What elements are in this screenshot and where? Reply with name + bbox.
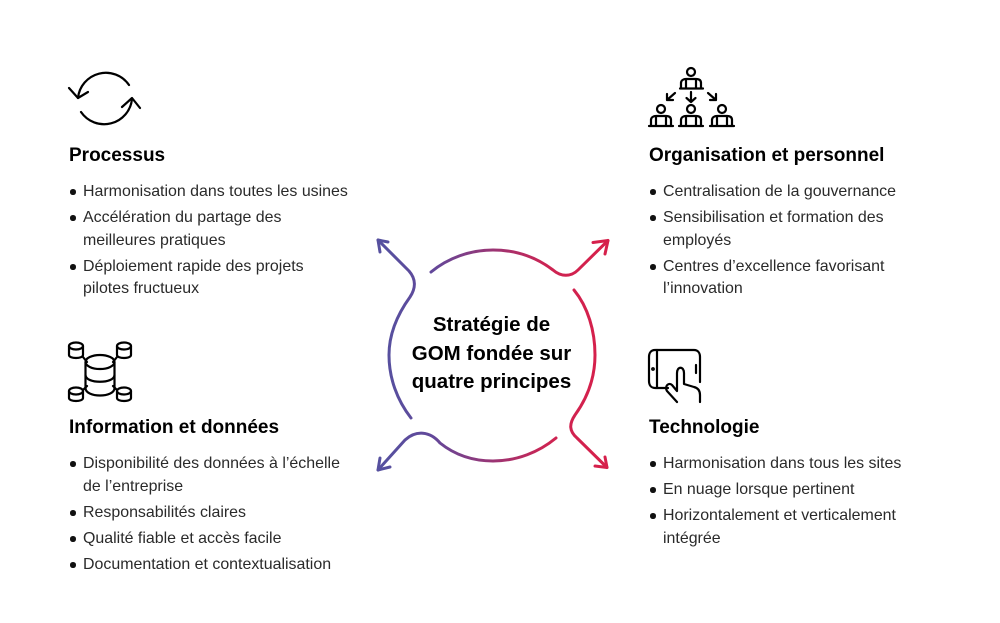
heading: Processus (69, 145, 165, 166)
block: Processus: Accélération du partage des (83, 209, 281, 226)
block: Technologie: En nuage lorsque pertinent (663, 481, 854, 498)
block: Organisation et personnel: Centralisation de la gouvernance (663, 183, 896, 200)
center title: quatre principes (412, 370, 571, 393)
heading: Technologie (649, 417, 759, 438)
block: Organisation et personnel: employés (663, 232, 731, 249)
block: Technologie: Horizontalement et verticalement (663, 507, 896, 524)
block: Processus: Harmonisation dans toutes les usines (83, 183, 348, 200)
center title: Stratégie de (433, 313, 550, 336)
block: Organisation et personnel: Centres d’excellence favorisant (663, 258, 884, 275)
block: Technologie (649, 417, 901, 547)
block: Organisation et personnel: Sensibilisation et formation des (663, 209, 884, 226)
block: Information et données (69, 417, 340, 573)
block: Technologie: intégrée (663, 530, 721, 547)
heading: Information et données (69, 417, 279, 438)
block: Information et données: Qualité fiable et accès facile (83, 530, 281, 547)
block: Organisation et personnel: l’innovation (663, 280, 743, 297)
block: Information et données: Documentation et contextualisation (83, 556, 331, 573)
block: Technologie: Harmonisation dans tous les sites (663, 455, 901, 472)
block: Organisation et personnel (649, 145, 896, 297)
block: Processus: meilleures pratiques (83, 232, 226, 249)
block: Information et données: de l’entreprise (83, 478, 183, 495)
block: Processus (69, 145, 348, 297)
block: Processus: Déploiement rapide des projets (83, 258, 304, 275)
block: Information et données: Disponibilité des données à l’échelle (83, 455, 340, 472)
block: Information et données: Responsabilités claires (83, 504, 246, 521)
block: Processus: pilotes fructueux (83, 280, 199, 297)
center title: GOM fondée sur (412, 342, 571, 364)
heading: Organisation et personnel (649, 145, 884, 166)
center title (412, 313, 571, 393)
